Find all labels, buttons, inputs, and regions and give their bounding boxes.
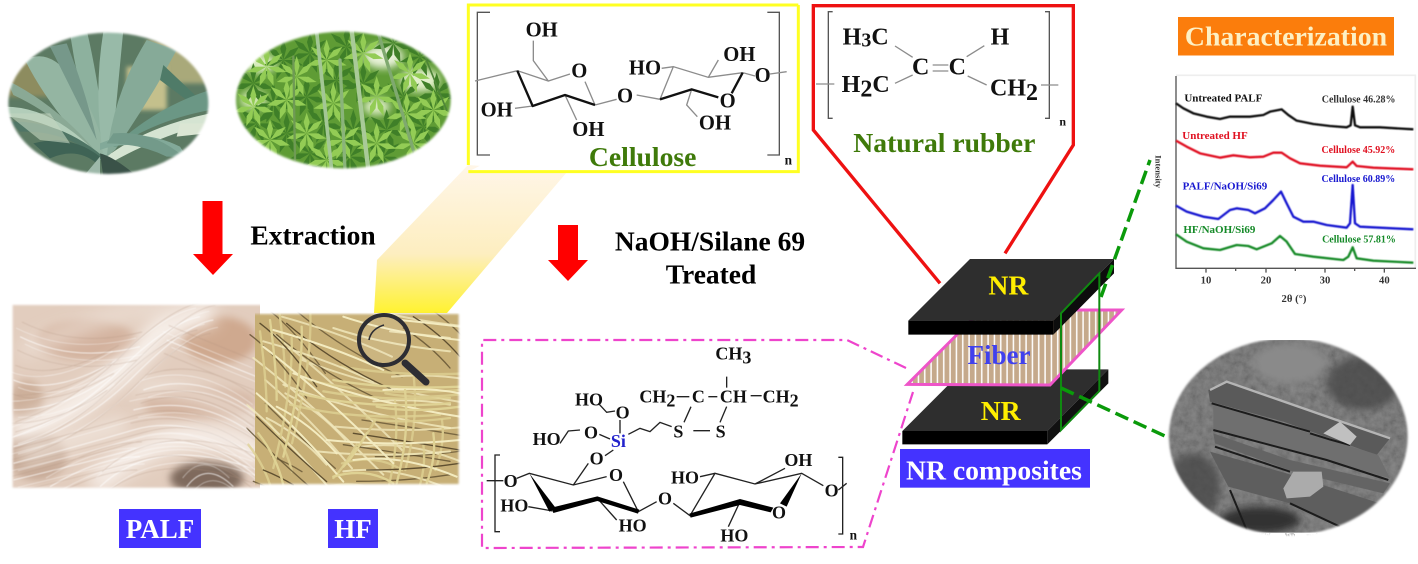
dashed callout: silane grafted cellulose: [482, 340, 913, 548]
bottom NR plate: [902, 369, 1108, 444]
series labels: Cellulose 57.81%: [1322, 234, 1396, 245]
atom labels: C: [692, 387, 705, 407]
green cross-section: [1061, 273, 1099, 430]
atom labels: HO: [500, 496, 528, 516]
atom labels: O: [609, 465, 623, 485]
series labels: Cellulose 45.92%: [1321, 145, 1395, 156]
photo: pineapple plant: [6, 31, 210, 176]
SEM micrograph: mode: [1306, 534, 1321, 540]
atom labels: OH: [481, 100, 513, 122]
photo: HF fibers with magnifier: [246, 312, 460, 486]
atom labels: O: [720, 91, 736, 113]
curve: untreated HF: [1176, 141, 1413, 169]
series labels: PALF/NaOH/Si69: [1183, 181, 1268, 193]
yellow frame: [468, 5, 798, 172]
atom labels: HO: [720, 526, 748, 546]
label: NaOH/Silane 69 Treated: Treated: [666, 258, 756, 290]
magnification beam: [374, 165, 567, 313]
series labels: Untreated PALF: [1184, 92, 1263, 104]
atom labels: CH: [720, 387, 747, 407]
axis labels: 30: [1320, 275, 1330, 286]
atoms: 3: [861, 29, 871, 51]
label: NR composites: NR composites: [906, 454, 1082, 485]
label: HF: HF: [334, 514, 372, 544]
axis labels: [1153, 155, 1390, 305]
atom labels: O: [571, 61, 587, 83]
atom labels: HO: [629, 57, 661, 79]
subscript n: n: [785, 152, 793, 167]
atoms: 2: [860, 77, 872, 103]
bonds: [487, 377, 847, 527]
chemical structure: silane treated cellulose: [487, 343, 858, 546]
title: cellulose: Cellulose: [589, 141, 696, 172]
atom labels: O: [658, 488, 672, 508]
curve: PALF/NaOH/Si69: [1176, 185, 1413, 229]
atom labels: O: [617, 86, 633, 108]
dashed connector to XRD chart: [1101, 160, 1150, 297]
atom labels: O: [590, 448, 604, 468]
title: natural rubber: Natural rubber: [853, 127, 1035, 158]
label: PALF: [119, 509, 201, 548]
atom labels: CH: [715, 343, 742, 363]
atom labels: OH: [699, 112, 731, 134]
atom labels: [481, 20, 771, 141]
photo: hemp plants: [234, 30, 452, 170]
labels: NR: [988, 269, 1029, 300]
atom labels: 3: [742, 347, 751, 367]
atom labels: OH: [526, 20, 558, 42]
arrow: extraction: [193, 201, 233, 275]
brackets: [828, 12, 1049, 118]
atoms: H: [843, 25, 861, 51]
atom labels: S: [673, 422, 683, 442]
series labels: HF/NaOH/Si69: [1183, 224, 1256, 236]
series labels: Untreated HF: [1182, 130, 1248, 142]
heading: characterization: Characterization: [1185, 22, 1388, 52]
axis labels: 40: [1379, 275, 1390, 286]
atom labels: S: [716, 422, 726, 442]
atoms: H: [991, 25, 1010, 51]
bonds: [475, 41, 787, 120]
atom labels: O: [584, 422, 598, 442]
atom labels: Si: [611, 431, 626, 451]
atom labels: [500, 343, 858, 546]
arrow: treatment: [548, 225, 588, 281]
atom labels: O: [772, 503, 786, 523]
atom labels: O: [825, 481, 839, 501]
atom labels: OH: [572, 119, 604, 141]
photo: PALF fibers: [7, 302, 261, 500]
SEM micrograph: [1163, 337, 1413, 543]
series labels: [1182, 92, 1396, 245]
axes: [1176, 76, 1416, 273]
label: NaOH/Silane 69 Treated: [615, 226, 805, 290]
atom labels: O: [755, 65, 771, 87]
dashed connector to SEM image: [1061, 388, 1167, 437]
subscript n: n: [1059, 115, 1066, 129]
brackets: [495, 455, 843, 534]
atoms: 2: [1026, 80, 1038, 106]
atom labels: 2: [790, 391, 799, 411]
atom labels: CH: [763, 387, 790, 407]
composite sandwich diagram: [900, 259, 1122, 488]
atom labels: O: [616, 402, 630, 422]
axis labels: 10: [1201, 275, 1211, 286]
SEM micrograph: WD: [1285, 534, 1296, 540]
atom labels: OH: [784, 450, 812, 470]
red callout outline: [813, 6, 1073, 283]
fiber layer: [907, 310, 1122, 385]
atoms: C: [872, 72, 890, 98]
atoms: [842, 25, 1038, 106]
curve: untreated PALF: [1176, 103, 1413, 129]
bonds: [816, 46, 1058, 85]
atom labels: HO: [533, 429, 561, 449]
brackets: [477, 12, 779, 155]
label: extraction: Extraction: [250, 220, 376, 250]
series labels: Cellulose 60.89%: [1321, 174, 1395, 185]
atoms: H: [842, 72, 860, 98]
label: HF: [328, 509, 378, 548]
series labels: Cellulose 46.28%: [1322, 94, 1396, 105]
atom labels: HO: [671, 468, 699, 488]
plot frame shadow: [1176, 75, 1415, 268]
panel: cellulose structure: [468, 5, 798, 172]
XRD chart: [1153, 75, 1416, 305]
atom labels: OH: [723, 44, 755, 66]
atoms: C: [949, 55, 966, 81]
label: NaOH/Silane 69 Treated: NaOH/Silane 69: [615, 226, 805, 256]
composite sandwich diagram: NR: [981, 395, 1022, 426]
top NR plate: [908, 259, 1114, 335]
axis labels: 20: [1261, 275, 1271, 286]
panel: natural rubber structure: [813, 6, 1073, 283]
curve: HF/NaOH/Si69: [1176, 234, 1413, 263]
atom labels: n: [850, 527, 858, 542]
wedge bonds: [529, 473, 556, 512]
SEM micrograph: HFW: [1256, 534, 1270, 540]
icon: magnifying glass: [359, 315, 426, 382]
composite sandwich diagram: Fiber: [968, 340, 1030, 370]
atom labels: O: [504, 471, 518, 491]
atom labels: 2: [666, 391, 675, 411]
atoms: CH: [990, 75, 1026, 101]
atom labels: HO: [575, 389, 603, 409]
axis labels: 2θ (°): [1282, 294, 1307, 305]
atoms: C: [912, 55, 929, 81]
atoms: C: [871, 25, 889, 51]
label: PALF: PALF: [126, 514, 194, 544]
atom labels: CH: [639, 387, 666, 407]
atom labels: HO: [619, 516, 647, 536]
axis labels: Intensity: [1153, 155, 1163, 189]
